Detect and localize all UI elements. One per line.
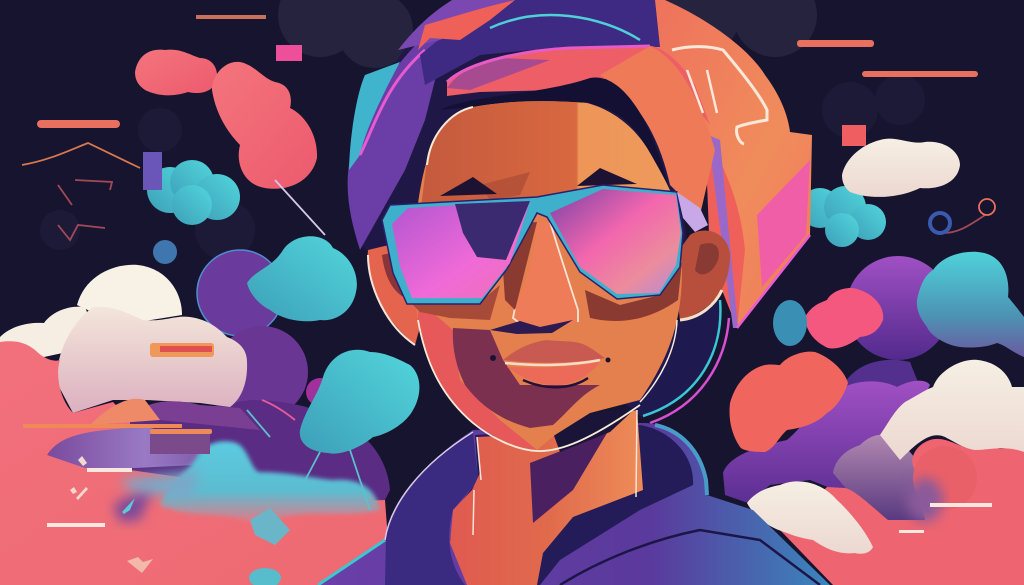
neck highlights: [473, 410, 637, 535]
ears: [368, 231, 730, 345]
coral stripe: [705, 130, 745, 328]
right cloud bank: [723, 139, 1024, 585]
teal mist: [160, 441, 380, 525]
face outline: [427, 107, 473, 165]
panel edge: [737, 235, 810, 328]
left lens: [392, 201, 530, 298]
left cloud bank: [0, 250, 390, 585]
coral small cloud right: [805, 288, 883, 348]
cream cloud bottom right: [747, 481, 873, 554]
left lens dark reflection: [455, 201, 530, 260]
coral cloud top left small: [135, 50, 217, 95]
teal arc: [490, 15, 640, 40]
teal cloud upper right: [800, 186, 886, 247]
teal cloud far right: [917, 252, 1024, 357]
hoodie: [318, 423, 830, 585]
visor band: [447, 46, 710, 125]
cheek shade under glasses right: [585, 262, 682, 321]
teal shoulder edge: [318, 540, 385, 585]
hood inner dark: [450, 425, 693, 585]
blob bottom: [249, 568, 281, 585]
teal cloud upper left: [147, 160, 240, 225]
big cream cloud: [57, 307, 247, 413]
teal shard: [250, 508, 290, 545]
fold line: [560, 530, 820, 585]
right lens: [550, 189, 681, 294]
helmet shell: [632, 0, 812, 328]
cheek shade under glasses left: [408, 285, 500, 320]
coral cloud right mid: [729, 352, 848, 452]
dark band around forehead: [440, 77, 668, 185]
helmet side panel: [757, 160, 810, 287]
purple crown: [398, 0, 515, 50]
face base: [414, 101, 682, 450]
sunglasses: [382, 185, 708, 304]
coral cloud bottom right bank: [780, 439, 1024, 585]
purple haze in bank: [907, 478, 943, 522]
face: [408, 101, 682, 451]
teal cloud mid left: [247, 236, 357, 321]
neck: [450, 410, 643, 585]
hair base dark: [350, 0, 690, 260]
teal hair patch: [349, 62, 400, 170]
helmet and hair: [348, 0, 812, 328]
temple: [677, 192, 708, 232]
coral cloud top left large: [212, 62, 317, 189]
purple band: [47, 427, 210, 468]
dark wedge: [113, 483, 155, 522]
cream cloud upper right: [842, 139, 960, 197]
purple clouds left: [130, 250, 390, 510]
nostril shadow: [490, 320, 573, 334]
frame: [382, 185, 683, 304]
purple hair: [348, 22, 500, 250]
mouth: [490, 340, 610, 387]
lavender stripe: [708, 135, 738, 328]
left cheek pink: [418, 300, 537, 450]
purple clouds right: [846, 256, 950, 360]
cream clouds left: [0, 265, 182, 360]
jaw shadow: [453, 328, 600, 428]
eyebrow right: [577, 168, 637, 186]
hood edge left: [385, 432, 473, 540]
starry band behind head: [620, 300, 729, 423]
blue blob right: [773, 300, 807, 346]
grey purple fade: [833, 435, 925, 520]
white highlights: [672, 47, 767, 144]
teal mist left: [120, 470, 200, 500]
eye shadow: [480, 172, 530, 200]
coral ground cloud left: [0, 341, 388, 585]
blue dot: [153, 240, 177, 264]
nose: [500, 222, 578, 325]
cream cloud right: [880, 360, 1024, 460]
neck shadow: [530, 433, 607, 523]
orange visor side: [600, 46, 715, 215]
dark background clouds: [278, 0, 817, 68]
forehead: [420, 101, 672, 215]
magenta hair stroke: [360, 50, 425, 155]
thin line marks: [22, 143, 995, 510]
orange glow: [90, 399, 160, 425]
chin shadow: [553, 407, 637, 452]
teal cloud lower left: [300, 350, 419, 454]
dark hair top: [420, 0, 660, 85]
coral hair top: [418, 0, 515, 50]
hood left fold: [385, 432, 478, 585]
eyebrow left: [440, 177, 497, 196]
